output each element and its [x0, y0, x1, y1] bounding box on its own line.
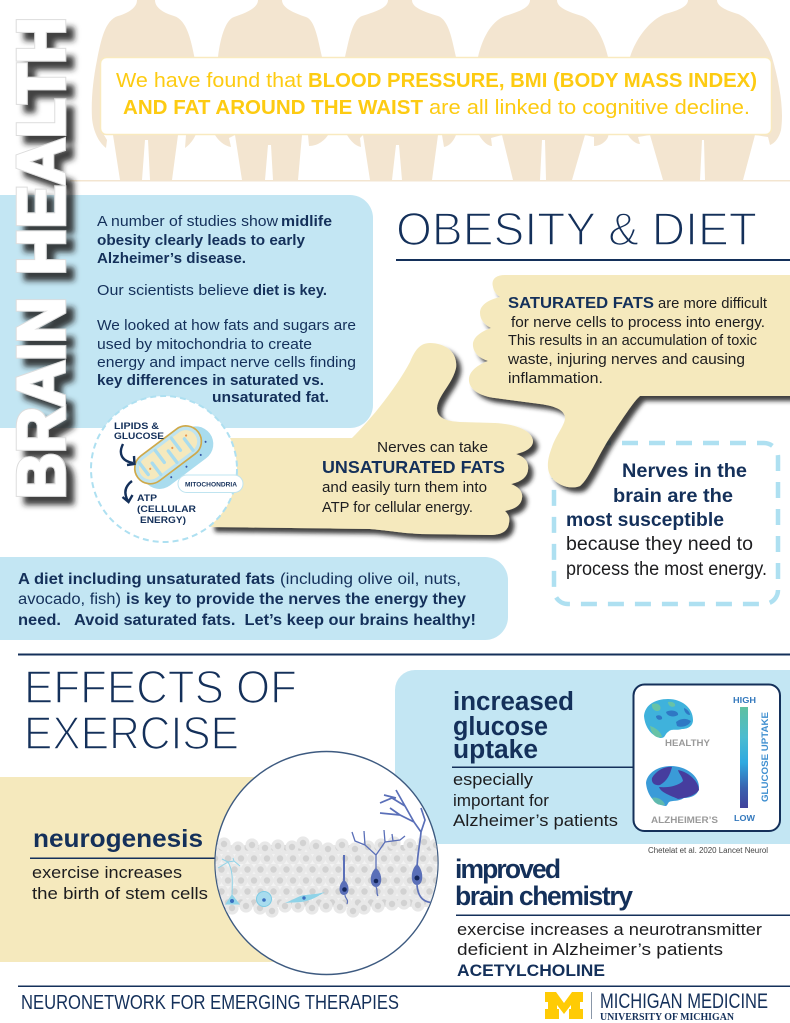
- mitochondria diagram: [91, 396, 243, 542]
- label: mitochondria pill: [178, 475, 243, 492]
- label: low: LOW: [734, 813, 756, 823]
- panel: healthy diet advice: is key to provide the nerves the energy they: [126, 591, 466, 608]
- heading: improved brain chemistry: [455, 854, 790, 916]
- thumbs down: saturated fats: waste, injuring nerves and causing: [507, 352, 745, 368]
- panel: midlife obesity: used by mitochondria to create: [97, 337, 312, 353]
- label: high: HIGH: [733, 695, 756, 705]
- panel: increased glucose uptake: increased: [453, 688, 574, 716]
- label: mitochondria pill: MITOCHONDRIA: [185, 482, 237, 488]
- callout: blood pressure, BMI and waist fat: AND FAT AROUND THE WAIST: [123, 97, 423, 119]
- thumbs up: unsaturated fats: and easily turn them into: [322, 479, 487, 496]
- text block: acetylcholine: exercise increases a neurotransmitter: [457, 920, 762, 939]
- heading: improved brain chemistry: improved: [455, 854, 561, 884]
- vertical title: brain health: BRAIN: [4, 297, 79, 499]
- label: lipids and glucose: LIPIDS &: [114, 421, 160, 431]
- mitochondria diagram: ENERGY): [140, 515, 186, 526]
- callout: nerves most susceptible: brain are the: [613, 485, 733, 507]
- panel: midlife obesity: midlife: [281, 214, 332, 230]
- panel: midlife obesity: A number of studies show: [97, 214, 279, 230]
- panel: increased glucose uptake: especially: [453, 770, 534, 789]
- icon: branching neuron: [352, 830, 405, 896]
- heading: improved brain chemistry: brain chemistry: [455, 881, 633, 911]
- thumbs down: saturated fats: [469, 275, 790, 487]
- panel: neurogenesis: the birth of stem cells: [32, 884, 208, 903]
- panel: healthy diet advice: avocado, fish): [18, 591, 121, 608]
- panel: midlife obesity: Our scientists believe: [97, 283, 249, 299]
- citation: Chetelat et al. 2020 Lancet Neurol: [648, 846, 768, 855]
- panel: midlife obesity: obesity clearly leads to early: [97, 233, 305, 249]
- legend: colour scale: [740, 707, 748, 808]
- panel: midlife obesity: Alzheimer’s disease.: [97, 251, 246, 267]
- label: Alzheimer's: ALZHEIMER’S: [651, 815, 718, 825]
- panel: healthy diet advice: [0, 557, 508, 640]
- panel: midlife obesity: diet is key.: [253, 283, 327, 299]
- callout: blood pressure, BMI and waist fat: are all linked to cognitive decline.: [429, 97, 750, 119]
- heading: effects of exercise: EFFECTS OF: [24, 661, 297, 713]
- callout: nerves most susceptible: [554, 443, 778, 604]
- icon: mature neuron: [380, 790, 436, 903]
- heading: effects of exercise: [24, 661, 297, 759]
- panel: healthy diet advice: A diet including unsaturated fats: [18, 571, 275, 588]
- footer: neuronetwork: NEURONETWORK FOR EMERGING THERAPIES: [21, 991, 399, 1014]
- thumbs down: saturated fats: This results in an accumulation of toxic: [508, 333, 757, 349]
- callout: blood pressure, BMI and waist fat: BLOOD PRESSURE, BMI (BODY MASS INDEX): [308, 70, 757, 92]
- label: healthy: HEALTHY: [665, 738, 710, 748]
- vertical title: brain health: BRAIN: [4, 297, 79, 499]
- thumbs up: unsaturated fats: Nerves can take: [377, 439, 488, 456]
- mitochondria diagram: (CELLULAR: [137, 504, 196, 515]
- arrow: into mitochondrion: [121, 444, 134, 465]
- panel: increased glucose uptake: important for: [453, 791, 549, 810]
- arrow: out to ATP: [122, 481, 132, 502]
- icon: block M: [545, 992, 583, 1019]
- thumbs down: saturated fats: for nerve cells to process into energy.: [511, 315, 765, 331]
- silhouettes: five figures of increasing body size: [70, 0, 790, 182]
- thumbs down: saturated fats: are more difficult: [658, 296, 767, 312]
- panel: healthy diet advice: Avoid saturated fats. Let’s keep our brains healthy!: [74, 612, 476, 629]
- panel: neurogenesis: exercise increases: [32, 863, 182, 882]
- panel: midlife obesity: unsaturated fat.: [212, 390, 329, 406]
- icon: maturing neuron: [340, 855, 348, 904]
- callout: nerves most susceptible: Nerves in the: [622, 460, 747, 482]
- thumbs up: unsaturated fats: ATP for cellular energy.: [322, 499, 473, 516]
- mitochondria diagram: GLUCOSE: [114, 431, 164, 441]
- text block: acetylcholine: ACETYLCHOLINE: [457, 962, 605, 980]
- callout: nerves most susceptible: because they need to: [566, 533, 753, 555]
- vertical title: brain health: HEALTH: [4, 17, 79, 275]
- text block: acetylcholine: [457, 920, 762, 980]
- icon: stem cell: [256, 892, 272, 906]
- icon: healthy brain: [644, 699, 693, 738]
- panel: midlife obesity: We looked at how fats and sugars are: [97, 318, 356, 334]
- panel: midlife obesity: key differences in saturated vs.: [97, 373, 324, 389]
- vertical title: brain health: HEALTH: [4, 17, 79, 275]
- panel: midlife obesity: energy and impact nerve cells finding: [97, 355, 356, 371]
- icon: young neuron: [218, 858, 240, 904]
- panel: increased glucose uptake: [395, 670, 790, 844]
- thumbs up: unsaturated fats: [200, 343, 533, 535]
- callout: blood pressure, BMI and waist fat: We have found that: [116, 70, 302, 92]
- logo: Michigan Medicine: UNIVERSITY OF MICHIGAN: [600, 1012, 734, 1023]
- chart: glucose uptake brain scans: [634, 684, 780, 831]
- illustration: neurons in tissue circle: [212, 752, 443, 974]
- logo: Michigan Medicine: [545, 990, 768, 1023]
- panel: increased glucose uptake: Alzheimer’s patients: [453, 811, 618, 830]
- panel: healthy diet advice: (including olive oil, nuts,: [280, 571, 461, 588]
- panel: midlife obesity: [0, 195, 373, 428]
- panel: neurogenesis: neurogenesis: [33, 825, 203, 853]
- thumbs up: unsaturated fats: UNSATURATED FATS: [322, 457, 505, 477]
- icon: mitochondrion: [129, 415, 220, 498]
- icon: Alzheimer's brain: [646, 766, 699, 806]
- text block: acetylcholine: deficient in Alzheimer’s patients: [457, 940, 723, 959]
- panel: increased glucose uptake: uptake: [453, 736, 538, 764]
- callout: nerves most susceptible: process the most energy.: [566, 558, 767, 580]
- callout: blood pressure, BMI and waist fat: [100, 58, 772, 134]
- icon: migrating cell: [285, 892, 325, 903]
- heading: effects of exercise: EXERCISE: [24, 707, 239, 759]
- heading: obesity and diet: OBESITY & DIET: [396, 203, 757, 255]
- thumbs down: saturated fats: SATURATED FATS: [508, 295, 654, 312]
- label: glucose uptake axis: GLUCOSE UPTAKE: [760, 712, 770, 802]
- thumbs down: saturated fats: inflammation.: [508, 371, 603, 387]
- callout: nerves most susceptible: most susceptible: [566, 509, 724, 531]
- vertical title: brain health: [4, 17, 79, 499]
- label: ATP: ATP: [137, 493, 158, 504]
- panel: increased glucose uptake: glucose: [453, 713, 548, 741]
- panel: healthy diet advice: need.: [18, 612, 61, 629]
- panel: neurogenesis: [0, 777, 280, 962]
